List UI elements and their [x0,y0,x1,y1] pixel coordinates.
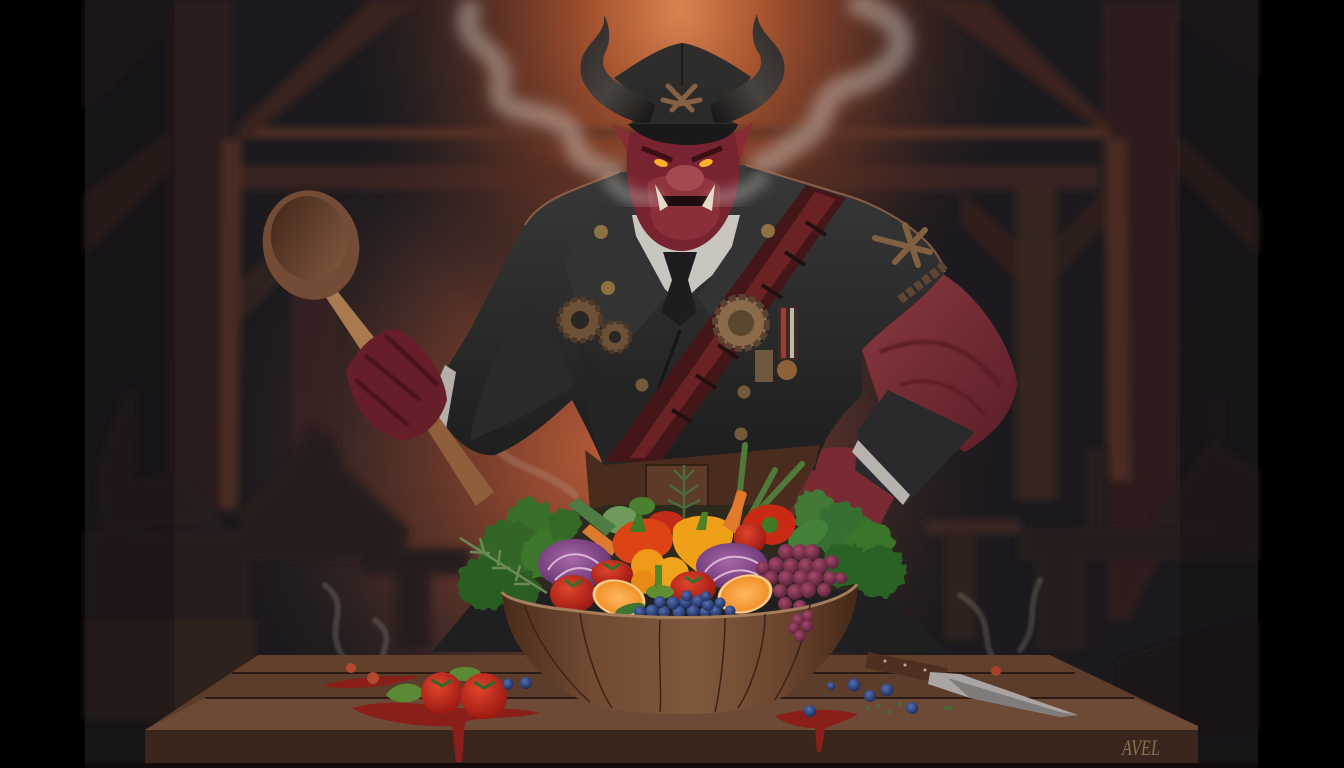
breath steam from the tusks [610,178,762,200]
lower coat shading [580,345,680,470]
yellow bell pepper [673,512,733,572]
white shirt [632,215,740,305]
gear left small [600,322,630,352]
right lapel [698,165,785,330]
right horn [710,14,785,123]
cheeks and muzzle [648,175,720,226]
left bench silhouettes [85,390,470,720]
lower lip [650,206,720,240]
collar pin left [594,225,608,239]
glowing left eye [653,158,669,168]
nose [666,165,704,191]
loose blueberries [502,677,918,717]
rear red pepper centre [648,511,684,533]
shoulder gear strip [900,265,945,300]
artist signature: AVEL [1121,735,1160,760]
right muscular red arm [795,268,1017,525]
basil leaf by blueberries [614,600,646,618]
ladle bowl [253,181,369,309]
orange pepper front [631,549,689,594]
spinach leaf [783,514,833,556]
forearm and fist at the waist [795,447,899,525]
left kale [458,498,581,610]
table [85,655,1258,768]
uniform decorations: gears and medals [559,224,945,434]
carrots front left [723,490,747,534]
red pepper right [742,504,795,545]
side vignette [85,0,175,768]
handle [325,292,400,382]
coat opening line [640,330,680,440]
leather belt [585,445,820,513]
uniform torso [432,165,945,470]
small green leaf [646,585,674,599]
head with horns and cap [580,14,785,251]
ladle cup interior [263,189,355,287]
tomatoes in the bowl [550,560,716,613]
blood spill left [322,676,540,762]
wooden salad bowl [502,584,857,714]
face [627,132,740,251]
brows [642,148,722,160]
gear left large hub [571,311,589,329]
table tomatoes and basil [346,663,1001,719]
red pepper centre stem [630,515,646,532]
cuff on left arm [432,365,456,435]
left tusk [655,184,668,211]
collar pin right [761,224,775,238]
gear left large [559,299,601,341]
gear left small hub [609,331,621,343]
red pepper centre [613,519,673,564]
orange slice right [713,568,777,620]
glowing right eye [698,158,714,168]
handle lower section [420,416,494,506]
right bench silhouettes [925,400,1258,730]
black tie [661,252,697,326]
gear right [715,297,767,349]
blood spill right [775,710,858,752]
tomato behind yellow pepper [734,522,766,554]
medal disc [777,360,797,380]
ribbon red stripe [781,308,786,358]
cap crease [681,43,683,86]
mouth [662,196,708,206]
left lapel [565,170,668,345]
vegetable pile [458,445,906,622]
cap band [634,88,728,125]
shoulder emblem [875,225,930,265]
medal ribbon right [778,306,798,360]
brim highlight [678,128,682,144]
ribbon pale stripe [790,308,794,358]
rosemary sprig [460,538,547,593]
grapes [756,544,847,614]
steam wisps above the head [467,5,901,172]
cap brim [628,124,738,145]
cap emblem [663,86,700,110]
kitchen knife [865,652,1078,717]
right tusk [702,184,715,211]
coat skirt behind the bowl [432,570,948,652]
red diagonal sash [605,185,846,462]
cap crown [614,43,751,125]
wooden beams [85,0,1258,620]
left red fist [346,329,447,440]
gear right hub [728,310,754,336]
sleeve shading [470,300,575,440]
lapel pin [601,281,615,295]
pepper right stem [762,517,778,533]
left horn [580,15,655,123]
coat buttons [642,385,744,434]
left ear [612,123,648,178]
right greens [793,490,906,598]
right ear [722,122,753,178]
shoulder highlights [525,165,945,272]
purple cabbages [538,539,768,589]
medal left [755,350,773,382]
right black cuff [852,390,975,505]
wooden ladle [253,181,494,506]
blueberries [634,590,736,618]
grape cluster tail over the rim [788,610,814,642]
herb crumbs [866,702,954,714]
dark pile backdrop [510,505,860,590]
orange slice left [588,574,650,622]
steam wisps at table level [325,440,1040,670]
celery and carrots at the back [568,445,802,556]
